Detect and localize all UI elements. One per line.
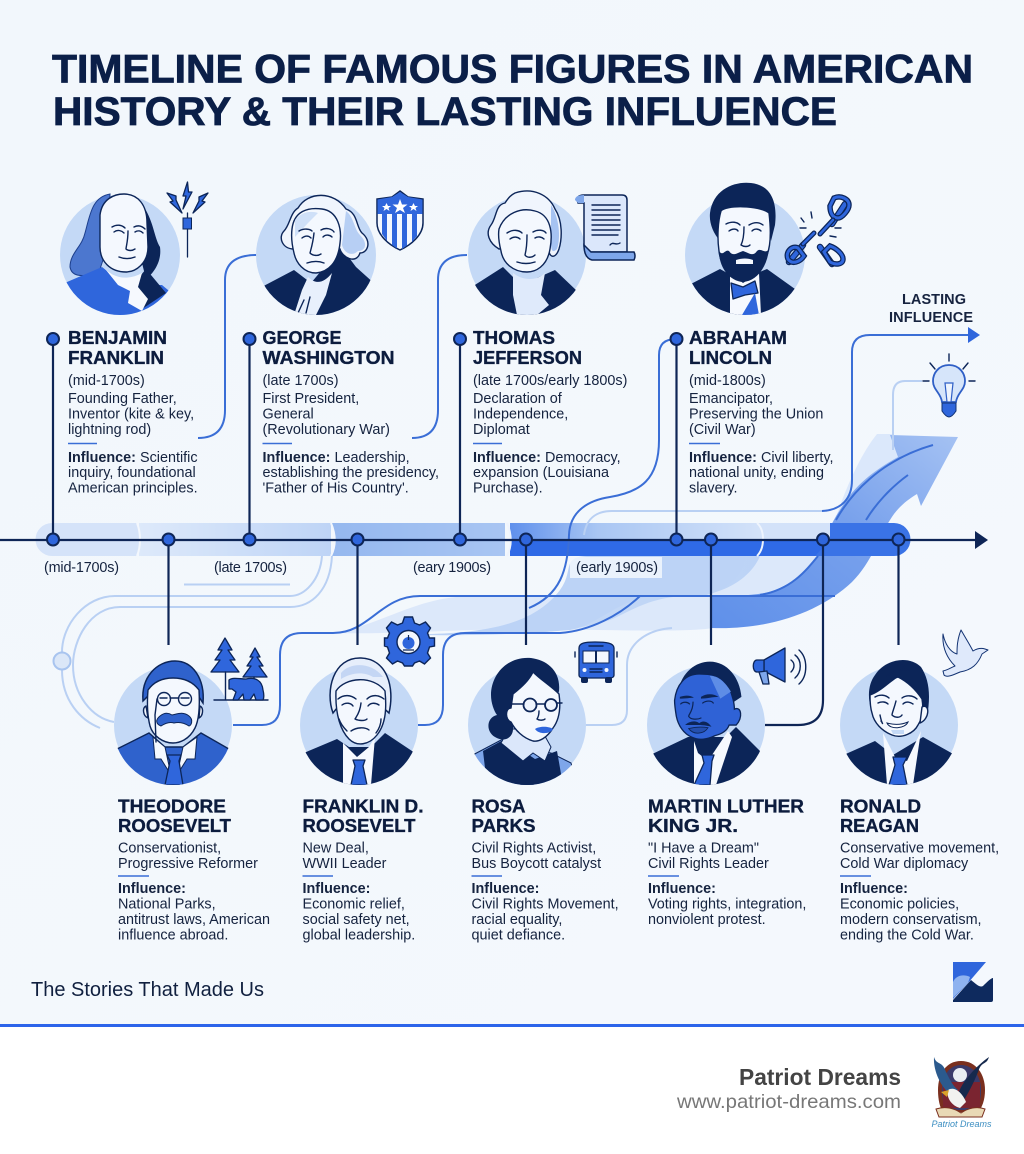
influence: Influence: bbox=[473, 450, 541, 466]
timeline date labels: (early 1900s) bbox=[576, 560, 658, 576]
name bbox=[648, 796, 804, 836]
description: Progressive Reformer bbox=[118, 856, 258, 872]
description: Cold War diplomacy bbox=[840, 856, 969, 872]
description: Bus Boycott catalyst bbox=[472, 856, 601, 872]
label: lasting influence bbox=[889, 292, 973, 326]
icon: corner logo bbox=[953, 962, 993, 1002]
name: GEORGE bbox=[262, 328, 342, 348]
name bbox=[262, 328, 394, 368]
name: REAGAN bbox=[840, 816, 919, 836]
name: WASHINGTON bbox=[262, 348, 394, 368]
influence: Influence: bbox=[68, 450, 136, 466]
timeline date labels bbox=[44, 557, 662, 578]
portrait: Theodore Roosevelt bbox=[113, 661, 233, 785]
divider bbox=[262, 442, 292, 444]
portrait: Ronald Reagan bbox=[839, 660, 959, 785]
description: (Revolutionary War) bbox=[262, 422, 390, 438]
influence: Influence: bbox=[118, 881, 186, 897]
name bbox=[473, 328, 582, 368]
panel: Franklin D. Roosevelt bbox=[299, 617, 434, 944]
name bbox=[302, 796, 424, 836]
panel: Abraham Lincoln bbox=[685, 183, 849, 496]
description: (late 1700s) bbox=[262, 373, 338, 389]
description: Civil Rights Leader bbox=[648, 856, 769, 872]
icon: scroll bbox=[575, 195, 635, 260]
connector: Washington to Jefferson bbox=[412, 255, 467, 438]
description: Founding Father, bbox=[68, 391, 177, 407]
influence: establishing the presidency, bbox=[262, 465, 439, 481]
flowing ribbons behind the timeline bbox=[332, 434, 958, 635]
influence: Influence: bbox=[648, 881, 716, 897]
influence: racial equality, bbox=[472, 912, 562, 928]
influence: quiet defiance. bbox=[472, 928, 565, 944]
name bbox=[118, 796, 231, 836]
influence: modern conservatism, bbox=[840, 912, 982, 928]
description: (mid-1700s) bbox=[68, 373, 145, 389]
logo: Patriot Dreams eagle: Patriot Dreams bbox=[932, 1119, 992, 1130]
influence: antitrust laws, American bbox=[118, 912, 270, 928]
icon: broken chains bbox=[787, 197, 849, 264]
influence: Economic relief, bbox=[302, 896, 405, 912]
portrait: Washington bbox=[256, 195, 376, 315]
description: WWII Leader bbox=[302, 856, 387, 872]
influence: national unity, ending bbox=[689, 465, 824, 481]
description: Diplomat bbox=[473, 422, 530, 438]
panel: Martin Luther King Jr. bbox=[646, 648, 806, 928]
influence: Voting rights, integration, bbox=[648, 896, 806, 912]
description: First President, bbox=[262, 391, 359, 407]
panel: Ronald Reagan bbox=[839, 630, 999, 944]
influence: nonviolent protest. bbox=[648, 912, 766, 928]
influence: Civil Rights Movement, bbox=[472, 896, 619, 912]
icon: light bulb bbox=[923, 354, 975, 417]
influence: Economic policies, bbox=[840, 896, 959, 912]
description: General bbox=[262, 406, 314, 422]
description: Emancipator, bbox=[689, 391, 773, 407]
name: ABRAHAM bbox=[689, 328, 787, 348]
name: FRANKLIN bbox=[68, 348, 164, 368]
name: ROOSEVELT bbox=[302, 816, 416, 836]
label: lasting influence: LASTING bbox=[902, 292, 966, 308]
influence: ending the Cold War. bbox=[840, 928, 974, 944]
connector: Franklin D. Roosevelt bbox=[418, 596, 640, 725]
name: MARTIN LUTHER bbox=[648, 796, 804, 816]
panel: Rosa Parks bbox=[467, 642, 619, 944]
description: Conservative movement, bbox=[840, 840, 999, 856]
timeline date labels: (eary 1900s) bbox=[413, 560, 491, 576]
influence: American principles. bbox=[68, 480, 198, 496]
description: (late 1700s/early 1800s) bbox=[473, 373, 627, 389]
title bbox=[52, 48, 973, 134]
footer background bbox=[0, 1027, 1024, 1154]
description: Preserving the Union bbox=[689, 406, 823, 422]
divider bbox=[118, 875, 149, 877]
panel: Benjamin Franklin bbox=[60, 182, 208, 496]
name: BENJAMIN bbox=[68, 328, 167, 348]
divider bbox=[840, 875, 871, 877]
connector: Theodore Roosevelt bbox=[233, 596, 835, 725]
influence: 'Father of His Country'. bbox=[262, 480, 409, 496]
divider bbox=[68, 442, 97, 444]
title: HISTORY & THEIR LASTING INFLUENCE bbox=[53, 90, 837, 134]
icon: shield bbox=[377, 191, 423, 250]
panel: Theodore Roosevelt bbox=[113, 638, 270, 944]
name: ROOSEVELT bbox=[118, 816, 231, 836]
influence: Influence: bbox=[302, 881, 370, 897]
portrait: Franklin bbox=[60, 194, 180, 315]
connector: Franklin to Washington bbox=[198, 255, 257, 438]
icon: dove bbox=[943, 630, 988, 676]
name: ROSA bbox=[472, 796, 526, 816]
pale looping connector bbox=[54, 556, 332, 728]
icon: megaphone bbox=[753, 648, 806, 684]
label: lasting influence: INFLUENCE bbox=[889, 310, 973, 326]
name: PARKS bbox=[472, 816, 536, 836]
name bbox=[840, 796, 921, 836]
portrait: Rosa Parks bbox=[467, 658, 586, 785]
connector: bulb bbox=[893, 381, 922, 450]
icon: trees and bear bbox=[211, 638, 268, 700]
influence: slavery. bbox=[689, 480, 738, 496]
panel: George Washington bbox=[256, 191, 439, 496]
influence: Scientific bbox=[136, 450, 198, 466]
description: "I Have a Dream" bbox=[648, 840, 759, 856]
influence: Influence: bbox=[840, 881, 908, 897]
connector: Martin Luther King bbox=[765, 540, 823, 725]
tagline: The Stories That Made Us bbox=[31, 979, 264, 1001]
influence: expansion (Louisiana bbox=[473, 465, 609, 481]
name bbox=[68, 328, 167, 368]
divider bbox=[302, 875, 333, 877]
timeline date labels: (mid-1700s) bbox=[44, 560, 119, 576]
footer rule bbox=[0, 1024, 1024, 1027]
influence: inquiry, foundational bbox=[68, 465, 196, 481]
icon: bus bbox=[575, 642, 617, 683]
connector: Rosa Parks bbox=[585, 628, 672, 725]
footer brand text bbox=[676, 1064, 901, 1113]
influence: Influence: bbox=[472, 881, 539, 897]
description: Civil Rights Activist, bbox=[472, 840, 596, 856]
portrait: Martin Luther King Jr. bbox=[646, 662, 766, 785]
influence: Leadership, bbox=[330, 450, 410, 466]
portrait: Lincoln bbox=[685, 183, 805, 315]
influence: Purchase). bbox=[473, 480, 543, 496]
footer brand text: Patriot Dreams bbox=[739, 1064, 901, 1090]
divider bbox=[648, 875, 679, 877]
description: Conservationist, bbox=[118, 840, 221, 856]
footer brand text: www.patriot-dreams.com bbox=[676, 1091, 901, 1113]
title: TIMELINE OF FAMOUS FIGURES IN AMERICAN bbox=[52, 48, 973, 92]
name: THEODORE bbox=[118, 796, 226, 816]
name: KING JR. bbox=[648, 816, 738, 836]
description: New Deal, bbox=[302, 840, 369, 856]
name: FRANKLIN D. bbox=[302, 796, 424, 816]
name: RONALD bbox=[840, 796, 921, 816]
description: (mid-1800s) bbox=[689, 373, 766, 389]
description: Independence, bbox=[473, 406, 568, 422]
description: (Civil War) bbox=[689, 422, 756, 438]
influence: Influence: bbox=[262, 450, 330, 466]
portrait: Jefferson bbox=[467, 191, 587, 315]
name: LINCOLN bbox=[689, 348, 772, 368]
influence: National Parks, bbox=[118, 896, 216, 912]
logo: Patriot Dreams eagle bbox=[932, 1057, 992, 1130]
influence: Civil liberty, bbox=[757, 450, 833, 466]
description: lightning rod) bbox=[68, 422, 151, 438]
description: Inventor (kite & key, bbox=[68, 406, 194, 422]
name: THOMAS bbox=[473, 328, 555, 348]
timeline date labels: (late 1700s) bbox=[214, 560, 287, 576]
timeline band bbox=[36, 523, 910, 556]
panel: Thomas Jefferson bbox=[467, 191, 635, 496]
timeline axis bbox=[0, 333, 988, 645]
divider bbox=[689, 442, 720, 444]
name bbox=[689, 328, 787, 368]
name bbox=[472, 796, 536, 836]
connector: lasting influence arrow bbox=[584, 327, 980, 535]
influence: influence abroad. bbox=[118, 928, 228, 944]
description: Declaration of bbox=[473, 391, 563, 407]
arrow accent lines bbox=[760, 445, 933, 595]
divider bbox=[473, 442, 502, 444]
portrait: FDR bbox=[299, 658, 419, 785]
name: JEFFERSON bbox=[473, 348, 582, 368]
influence: global leadership. bbox=[302, 928, 415, 944]
icon: gear bbox=[384, 617, 434, 666]
connector: Jefferson to Lincoln bbox=[529, 339, 676, 608]
influence: Democracy, bbox=[541, 450, 621, 466]
icon: lightning rod bbox=[167, 182, 208, 257]
influence: Influence: bbox=[689, 450, 757, 466]
influence: social safety net, bbox=[302, 912, 410, 928]
divider bbox=[472, 875, 502, 877]
